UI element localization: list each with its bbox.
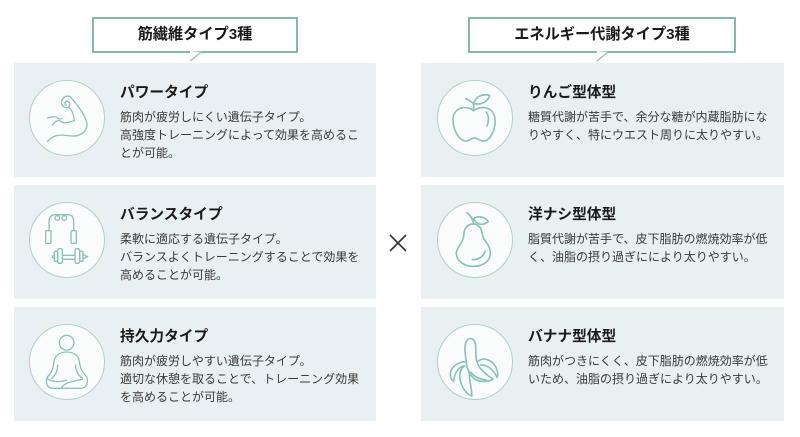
description: power type: 筋肉が疲労しにくい遺伝子タイプ。 — [120, 110, 311, 124]
panel: apple body type — [421, 63, 784, 177]
description: endurance type: 適切な休憩を取ることで、トレーニング効果 — [120, 372, 359, 386]
icon: peeled banana — [437, 324, 513, 400]
title: endurance type: 持久力タイプ — [120, 329, 208, 345]
description: apple body type: りやすく、特にウエスト周りに太りやすい。 — [528, 128, 768, 142]
title: pear body type: 洋ナシ型体型 — [528, 207, 616, 223]
panel: power type — [14, 63, 376, 177]
description: apple body type — [528, 110, 768, 142]
description: banana body type — [528, 354, 768, 386]
description: endurance type: を高めることが可能。 — [120, 390, 240, 404]
heading: energy metabolism types — [468, 17, 736, 53]
multiplication sign — [390, 234, 406, 252]
heading: energy metabolism types: エネルギー代謝タイプ3種 — [514, 26, 690, 43]
description: power type: とが可能。 — [120, 146, 180, 160]
heading pointer: muscle fiber — [190, 51, 201, 62]
description: banana body type: いため、油脂の摂り過ぎにより太りやすい。 — [528, 372, 768, 386]
icon: apple — [437, 80, 513, 156]
icon: meditating person — [29, 324, 105, 400]
description: pear body type: く、油脂の摂り過ぎににより太りやすい。 — [528, 250, 756, 264]
title: power type: パワータイプ — [120, 85, 208, 101]
title: banana body type: バナナ型体型 — [528, 329, 616, 345]
description: power type — [120, 110, 359, 160]
description: balance type — [120, 232, 359, 282]
icon: flexed arm — [29, 80, 105, 156]
description: apple body type: 糖質代謝が苦手で、余分な糖が内蔵脂肪にな — [528, 110, 768, 124]
description: power type: 高強度トレーニングによって効果を高めるこ — [120, 128, 359, 142]
description: banana body type: 筋肉がつきにくく、皮下脂肪の燃焼効率が低 — [528, 354, 768, 368]
icon: jump rope and dumbbell — [29, 202, 105, 278]
panel: pear body type — [421, 185, 784, 299]
heading: muscle fiber types: 筋繊維タイプ3種 — [138, 26, 252, 43]
title: apple body type: りんご型体型 — [528, 85, 616, 101]
heading pointer: energy metabolism — [596, 51, 608, 62]
panel: balance type — [14, 185, 376, 299]
description: pear body type — [528, 232, 768, 264]
panel: endurance type — [14, 307, 376, 421]
description: balance type: バランスよくトレーニングすることで効果を — [120, 250, 359, 264]
description: balance type: 柔軟に適応する遺伝子タイプ。 — [120, 232, 288, 246]
heading: muscle fiber types — [92, 17, 298, 53]
description: balance type: 高めることが可能。 — [120, 268, 228, 282]
description: endurance type — [120, 354, 359, 404]
description: pear body type: 脂質代謝が苦手で、皮下脂肪の燃焼効率が低 — [528, 232, 768, 246]
description: endurance type: 筋肉が疲労しやすい遺伝子タイプ。 — [120, 354, 312, 368]
title: balance type: バランスタイプ — [120, 207, 223, 223]
panel: banana body type — [421, 307, 784, 421]
icon: pear — [437, 202, 513, 278]
